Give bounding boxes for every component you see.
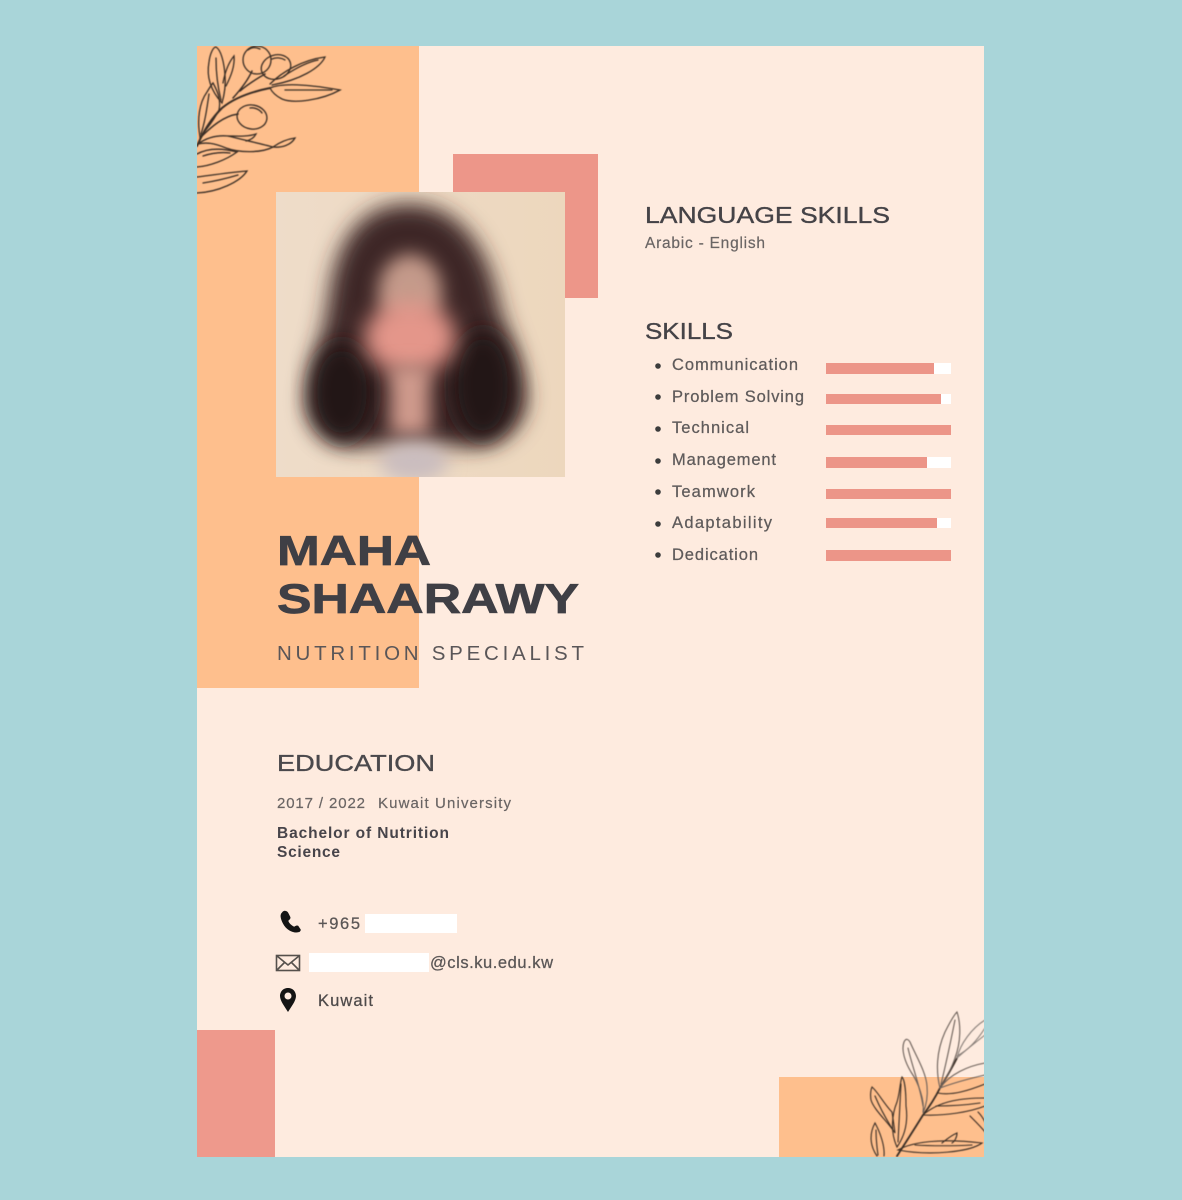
education dates and school: 2017 / 2022 [277,795,365,812]
contact: email [276,953,553,972]
heading: language skills: LANGUAGE SKILLS [645,202,890,228]
redacted number [365,914,457,933]
panel: orange left block [197,46,419,688]
panel: pink bottom-left block [197,1030,275,1157]
icon: envelope [276,956,300,970]
icon: phone [281,911,300,932]
panel: pink accent square [453,154,598,298]
skill: adaptability: Adaptability [672,514,773,532]
heading: education: EDUCATION [277,750,435,776]
skill: teamwork: Teamwork [672,483,756,501]
skill: technical [655,419,951,437]
skill: technical: Technical [672,419,749,437]
skill: management: Management [672,451,776,469]
degree [277,825,449,861]
lower hair left [310,342,374,442]
job title: NUTRITION SPECIALIST [277,642,584,665]
language list: Arabic - English [645,235,765,252]
name: SHAARAWY [277,575,579,622]
icon: map pin [280,988,296,1012]
education dates and school: Kuwait University [378,795,512,812]
resume card [197,46,984,1157]
skill: dedication: Dedication [672,546,758,564]
degree: Science [277,844,340,861]
skill: communication [655,356,951,374]
skill: adaptability [655,514,951,532]
skill: problem solving [655,388,951,406]
icon: leaf branch bottom-right [871,1012,985,1156]
skill: management [655,451,951,469]
face [378,254,442,330]
shirt [380,442,448,482]
lower hair right [451,330,515,440]
panel: orange bottom-right block [779,1077,984,1157]
hair [308,204,526,446]
contact: location [280,988,373,1012]
cheeks [364,302,456,374]
skills list [655,356,951,564]
education dates and school [277,795,512,812]
photo [276,192,565,482]
phone number: +965 [318,915,360,933]
name [277,527,579,622]
skill: communication: Communication [672,356,798,374]
location text: Kuwait [318,992,373,1010]
degree: Bachelor of Nutrition [277,825,449,842]
skill: teamwork [655,483,951,501]
heading: skills: SKILLS [645,318,733,344]
skill: problem solving: Problem Solving [672,388,804,406]
name: MAHA [277,527,431,574]
redacted address [309,953,429,972]
contact: phone [281,911,457,933]
email domain: @cls.ku.edu.kw [430,954,553,972]
neck [390,365,430,435]
icon: olive branch top-left [197,46,340,193]
photo background [276,192,565,477]
skill: dedication [655,546,951,564]
